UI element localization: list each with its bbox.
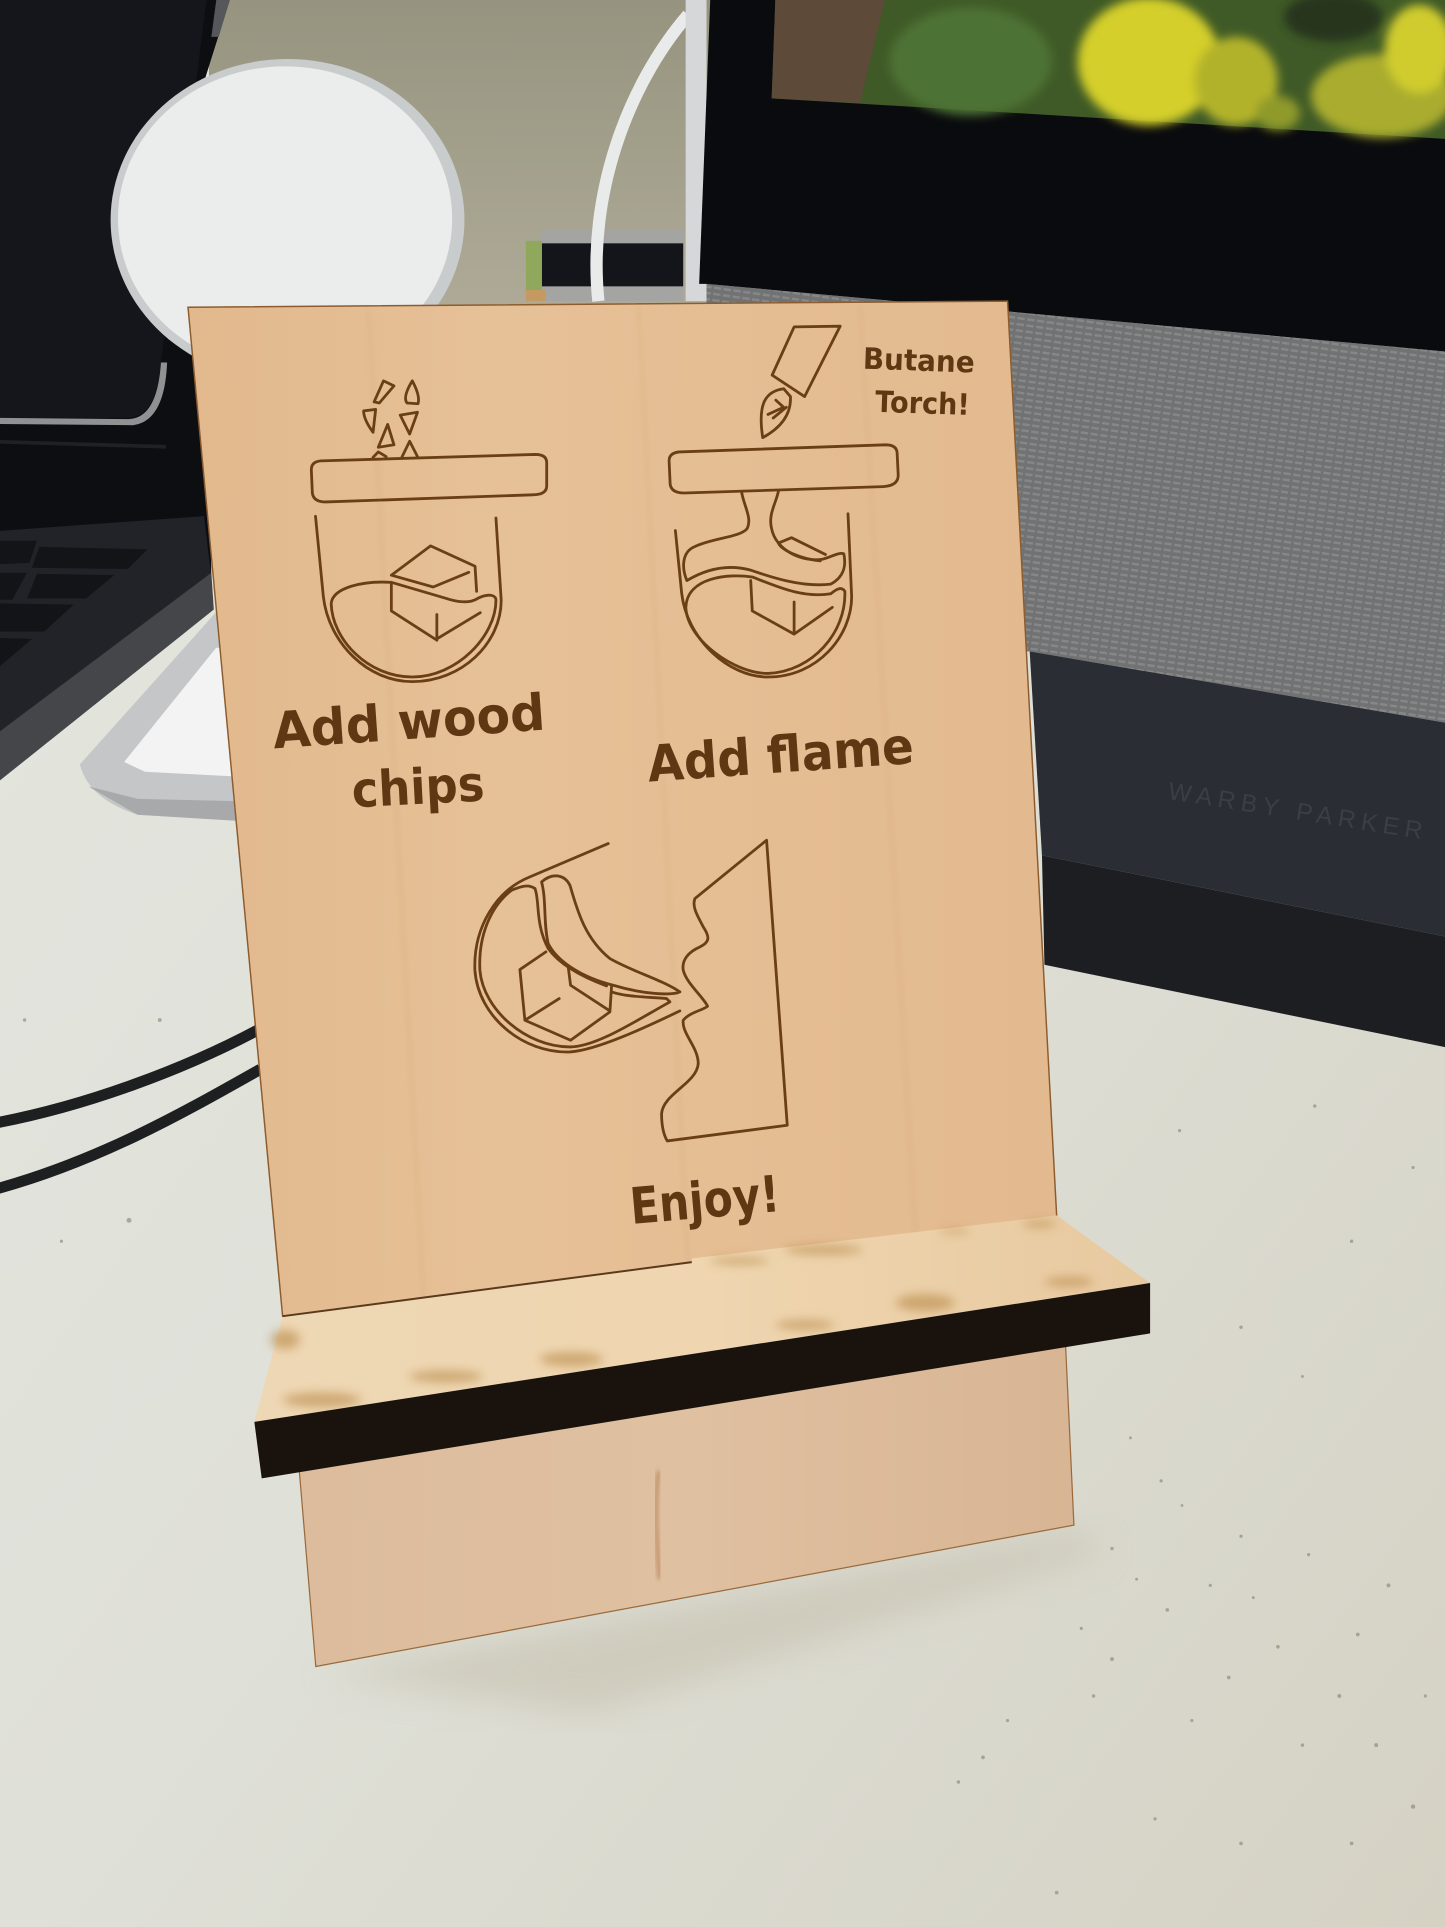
shelf top with scorch marks (254, 1215, 1150, 1422)
tilted glass (475, 844, 680, 1052)
label: Add flame: Add flame (645, 716, 916, 794)
smoke in glass with ice cube (675, 491, 852, 677)
step 2 icon: butane torch over lid and glass (669, 326, 898, 677)
label: Add wood chips: Add wood (271, 683, 547, 760)
laptop and tablet at left (0, 0, 230, 780)
wall background (209, 0, 713, 307)
white wireless charger disc (111, 59, 464, 381)
shadow under stand (322, 1531, 1106, 1714)
dark case with Warby Parker lettering (1030, 651, 1445, 1047)
wood chips falling (364, 381, 419, 457)
torch and flame (761, 326, 840, 438)
books behind (526, 230, 683, 301)
face profile (662, 840, 787, 1141)
desk speckles (23, 1018, 1427, 1894)
label: Butane Torch: Butane (862, 342, 975, 380)
smoker lid (669, 445, 898, 493)
monitor body (699, 0, 1445, 351)
label: Add wood chips: chips (350, 755, 486, 819)
keyboard keys (0, 541, 147, 666)
white stand pole (686, 0, 707, 301)
label: Butane Torch (862, 342, 975, 422)
monitor screen photo (772, 0, 1445, 139)
grey fabric speaker (707, 284, 1445, 723)
upright wood board (188, 301, 1057, 1316)
step 1 icon: wood chips over lid and glass (311, 381, 547, 682)
white stand foot (80, 612, 241, 821)
step 3 icon: tilted glass and drinker profile (475, 840, 787, 1141)
white cable (597, 15, 688, 301)
smoker lid (311, 454, 547, 502)
glass with ice cube (316, 516, 501, 682)
dark case with Warby Parker lettering: WARBY PARKER (1166, 778, 1430, 846)
label: Butane Torch: Torch! (875, 385, 970, 422)
lower base block (299, 1340, 1074, 1666)
black cables (0, 1030, 260, 1190)
shelf charred front edge (254, 1283, 1150, 1478)
label: Add wood chips (271, 683, 547, 819)
label: Enjoy: Enjoy! (627, 1164, 782, 1236)
